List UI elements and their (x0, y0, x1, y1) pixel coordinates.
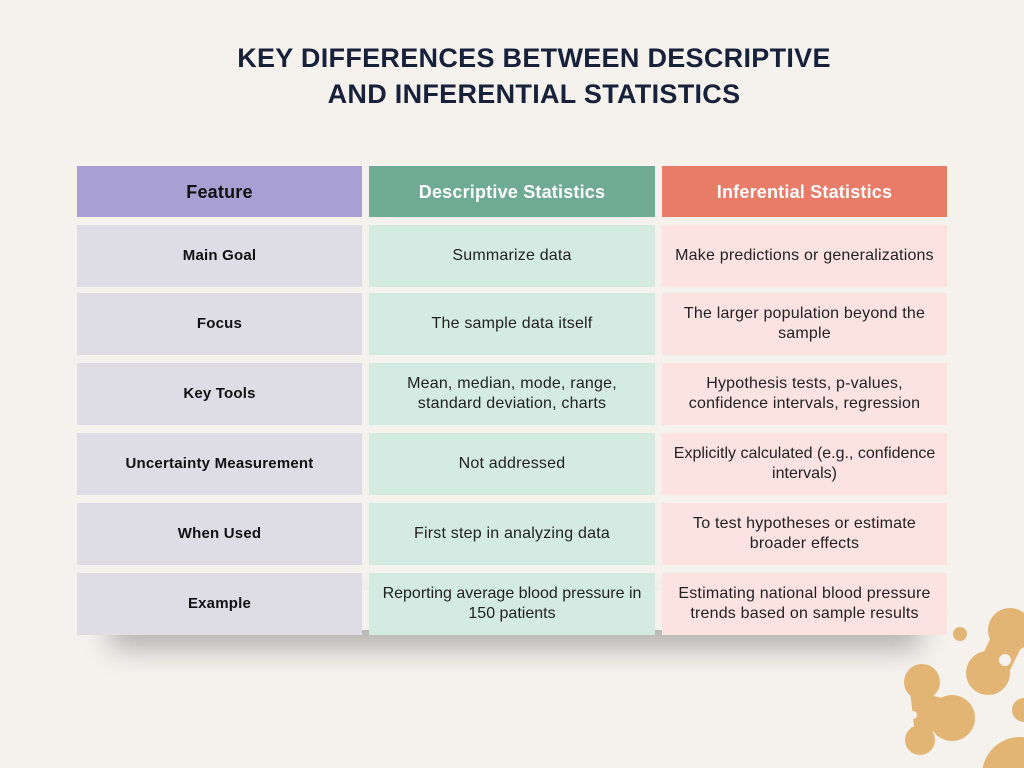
header: feature (77, 166, 362, 217)
row: example: Example (188, 595, 251, 612)
table: sample (778, 325, 831, 342)
row: main goal (77, 225, 362, 287)
table: intervals) (772, 465, 837, 482)
row: uncertainty: Uncertainty Measurement (126, 455, 314, 472)
table: Not addressed (459, 455, 565, 472)
table: Reporting average blood pressure in (383, 585, 641, 602)
table: trends based on sample results (690, 605, 919, 622)
row: key tools: Key Tools (183, 385, 256, 402)
header: inferential (662, 166, 947, 217)
header: descriptive: Descriptive Statistics (419, 182, 605, 202)
table: Estimating national blood pressure (678, 585, 931, 602)
table: Hypothesis tests, p-values, (706, 375, 903, 392)
header: descriptive (369, 166, 655, 217)
header: inferential: Inferential Statistics (717, 182, 892, 202)
table: To test hypotheses or estimate (693, 515, 916, 532)
table: standard deviation, charts (418, 395, 606, 412)
row: example (77, 573, 362, 635)
table: First step in analyzing data (414, 525, 610, 542)
table: Explicitly calculated (e.g., confidence (674, 445, 935, 462)
title: AND INFERENTIAL STATISTICS (328, 79, 740, 109)
row: when used (77, 503, 362, 565)
row: uncertainty (77, 433, 362, 495)
table: Mean, median, mode, range, (407, 375, 617, 392)
table: 150 patients (468, 605, 556, 622)
table: Make predictions or generalizations (675, 247, 934, 264)
row: when used: When Used (178, 525, 261, 542)
table: broader effects (750, 535, 859, 552)
decoration: blobs (904, 608, 1024, 768)
title (237, 43, 831, 109)
table shadow (110, 590, 920, 630)
title: KEY DIFFERENCES BETWEEN DESCRIPTIVE (237, 43, 831, 73)
row: focus: Focus (197, 315, 242, 332)
row: focus (77, 293, 362, 355)
table: confidence intervals, regression (689, 395, 920, 412)
table: The larger population beyond the (684, 305, 925, 322)
table: Summarize data (452, 247, 572, 264)
header: feature: Feature (186, 182, 253, 202)
table: The sample data itself (432, 315, 592, 332)
row: main goal: Main Goal (183, 247, 256, 264)
row: key tools (77, 363, 362, 425)
